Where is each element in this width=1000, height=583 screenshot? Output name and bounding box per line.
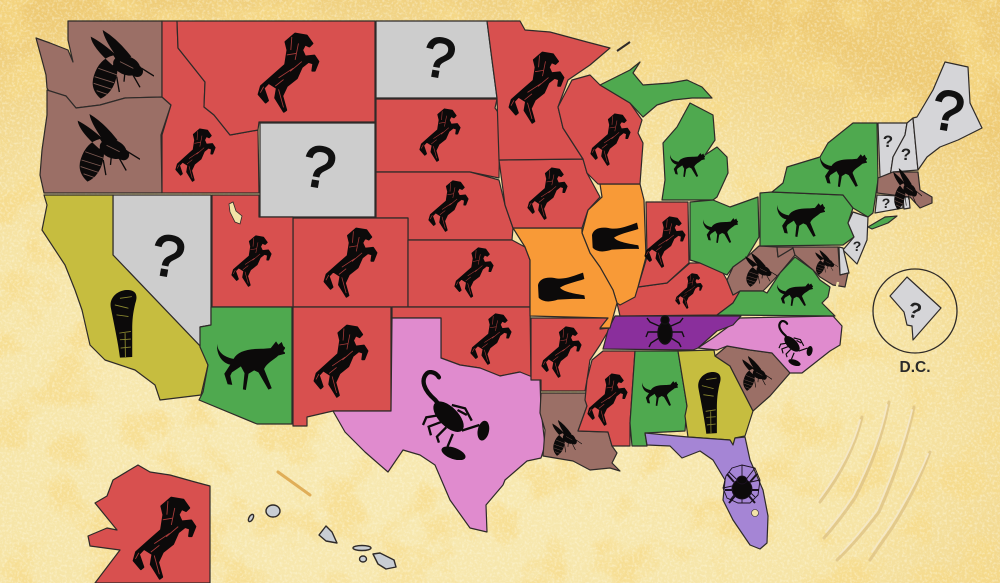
icons: unknown-animal question marks xyxy=(146,24,969,291)
state: Delaware xyxy=(839,247,849,275)
bay: Chesapeake xyxy=(834,282,838,314)
state: D.C. xyxy=(890,277,941,340)
state: Nevada xyxy=(113,195,211,347)
state: Maryland xyxy=(777,247,848,287)
state: New Jersey xyxy=(843,212,868,264)
state: Florida xyxy=(645,433,768,549)
state: New York xyxy=(772,123,878,217)
icons: wasps xyxy=(78,30,922,456)
icon: D.C. question mark: ? xyxy=(905,297,925,324)
state: Connecticut xyxy=(875,195,903,213)
state: North Carolina xyxy=(698,316,842,373)
lake: Okeechobee xyxy=(752,510,758,516)
state: Kentucky xyxy=(617,263,740,316)
state: Tennessee xyxy=(603,316,741,350)
state: Ohio xyxy=(690,197,759,275)
state: Kansas xyxy=(408,240,530,307)
state: Minnesota xyxy=(487,21,610,160)
icons: unknown-animal question marks: ? xyxy=(883,132,893,151)
state: Montana xyxy=(177,21,375,135)
lake: Great Salt Lake xyxy=(229,202,242,224)
icons: unknown-animal question marks: ? xyxy=(146,222,189,291)
inset: District of Columbia xyxy=(873,269,957,376)
state: Vermont xyxy=(878,123,907,177)
icons: unknown-animal question marks: ? xyxy=(853,238,861,254)
state: New Mexico xyxy=(293,307,391,426)
state: Alabama xyxy=(630,351,687,446)
state: Texas xyxy=(333,318,545,532)
state: Indiana xyxy=(638,202,689,287)
state: Long Island xyxy=(868,216,897,229)
state: Arkansas xyxy=(531,318,610,391)
state: Rhode Island xyxy=(903,197,910,209)
state: Virginia xyxy=(717,257,835,316)
state: Idaho xyxy=(162,21,259,193)
icons: unknown-animal question marks: ? xyxy=(418,24,460,91)
state: South Carolina xyxy=(715,346,790,411)
state: Oregon xyxy=(40,90,171,193)
state: Michigan lower peninsula xyxy=(662,103,728,200)
icons: unknown-animal question marks: ? xyxy=(882,195,890,211)
state: Nebraska xyxy=(376,172,513,240)
state: New Hampshire xyxy=(890,118,918,177)
icons: unknown-animal question marks: ? xyxy=(901,145,911,164)
state: Oklahoma xyxy=(392,307,531,380)
decorative fibre mark xyxy=(278,472,310,495)
icons: wolves xyxy=(217,153,868,406)
state: South Dakota xyxy=(376,99,500,178)
state: North Dakota xyxy=(376,21,497,98)
icon: tick on Tennessee xyxy=(646,316,684,347)
state: Washington xyxy=(36,21,162,108)
icons: horses xyxy=(134,34,702,579)
state: Colorado xyxy=(293,218,408,307)
state: Illinois xyxy=(582,184,646,305)
state: Louisiana xyxy=(540,393,620,471)
state: Iowa xyxy=(499,159,600,228)
icons: scorpions xyxy=(423,321,813,463)
state: Massachusetts xyxy=(877,172,932,208)
state: Mississippi xyxy=(578,351,635,446)
state: California xyxy=(42,195,208,400)
label: D.C.: D.C. xyxy=(900,359,930,376)
icons: alligators xyxy=(538,223,639,301)
icons: unknown-animal question marks: ? xyxy=(927,77,969,144)
state: Pennsylvania xyxy=(760,192,854,246)
icons: unknown-animal question marks: ? xyxy=(297,133,340,202)
islands: Hawaii xyxy=(247,505,396,569)
state: Missouri xyxy=(513,228,617,328)
state: Michigan upper peninsula xyxy=(600,62,712,117)
state: Maine xyxy=(913,62,982,170)
state: Wisconsin xyxy=(558,75,643,184)
state: West Virginia xyxy=(727,246,795,295)
state: Utah xyxy=(212,195,293,307)
icon: spider on Florida xyxy=(723,465,760,503)
island: Isle Royale xyxy=(617,42,630,51)
icons: cobras xyxy=(111,290,721,434)
state: Wyoming xyxy=(260,123,375,217)
state: Georgia xyxy=(678,350,753,445)
state: Arizona xyxy=(199,307,292,424)
claw scratches xyxy=(820,402,930,560)
state: Alaska xyxy=(88,465,210,583)
